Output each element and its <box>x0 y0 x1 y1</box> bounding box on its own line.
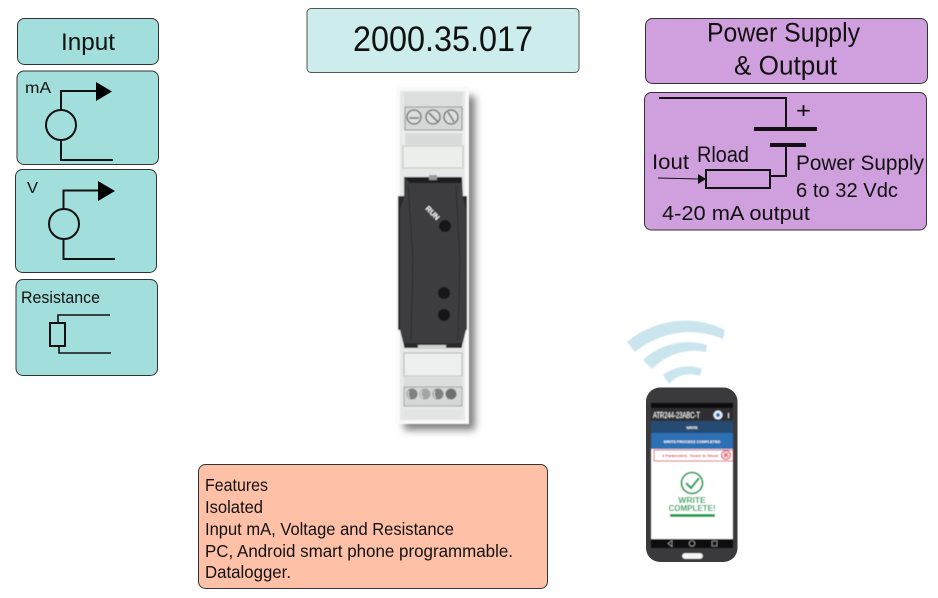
panel: features <box>198 464 548 588</box>
panel: power supply and output circuit <box>644 92 926 230</box>
panel: input heading <box>18 18 158 64</box>
panel: resistance input: Resistance <box>21 289 100 307</box>
panel: voltage input: V <box>27 180 38 197</box>
panel: power supply and output circuit: Power Supply <box>796 152 924 175</box>
device: DIN rail transmitter: RUN <box>424 204 441 222</box>
panel: power supply and output circuit: + <box>796 98 811 123</box>
icon: smartphone showing app <box>646 388 738 562</box>
icon: smartphone showing app: ATR244-23ABC-T <box>653 411 700 420</box>
panel: resistance input <box>16 280 158 376</box>
icon: wireless signal arcs <box>627 321 725 384</box>
panel: features: Datalogger. <box>205 562 291 582</box>
icon: smartphone showing app: 3 Parameters. Touch to Show <box>662 453 719 458</box>
panel: power supply and output circuit: Rload <box>697 142 749 167</box>
panel: mA input: mA <box>25 80 51 97</box>
panel: voltage input <box>16 170 156 272</box>
panel: power supply and output heading: Power Supply <box>707 18 860 48</box>
panel: features: PC, Android smart phone programmable. <box>205 541 513 561</box>
panel: power supply and output circuit: 6 to 32 Vdc <box>796 180 898 202</box>
panel: power supply and output heading: & Output <box>734 50 837 80</box>
panel: mA input <box>17 71 158 164</box>
icon: smartphone showing app: WRITE PROCESS COMPLETED <box>664 440 721 444</box>
icon: smartphone showing app: WRITE <box>678 495 706 505</box>
panel: power supply and output circuit: 4-20 mA output <box>662 203 810 225</box>
panel: features: Input mA, Voltage and Resistance <box>205 519 454 539</box>
panel: features: Isolated <box>205 497 263 517</box>
panel: features: Features <box>205 475 268 495</box>
panel: power supply and output circuit: Iout <box>652 151 689 174</box>
panel: power supply and output heading <box>646 18 928 84</box>
panel: input heading: Input <box>61 29 115 56</box>
title: model number <box>307 8 579 72</box>
icon: smartphone showing app: WRITE <box>686 426 698 430</box>
icon: smartphone showing app: COMPLETE! <box>668 503 716 513</box>
device: DIN rail transmitter <box>396 87 475 430</box>
title: model number: 2000.35.017 <box>353 20 533 59</box>
